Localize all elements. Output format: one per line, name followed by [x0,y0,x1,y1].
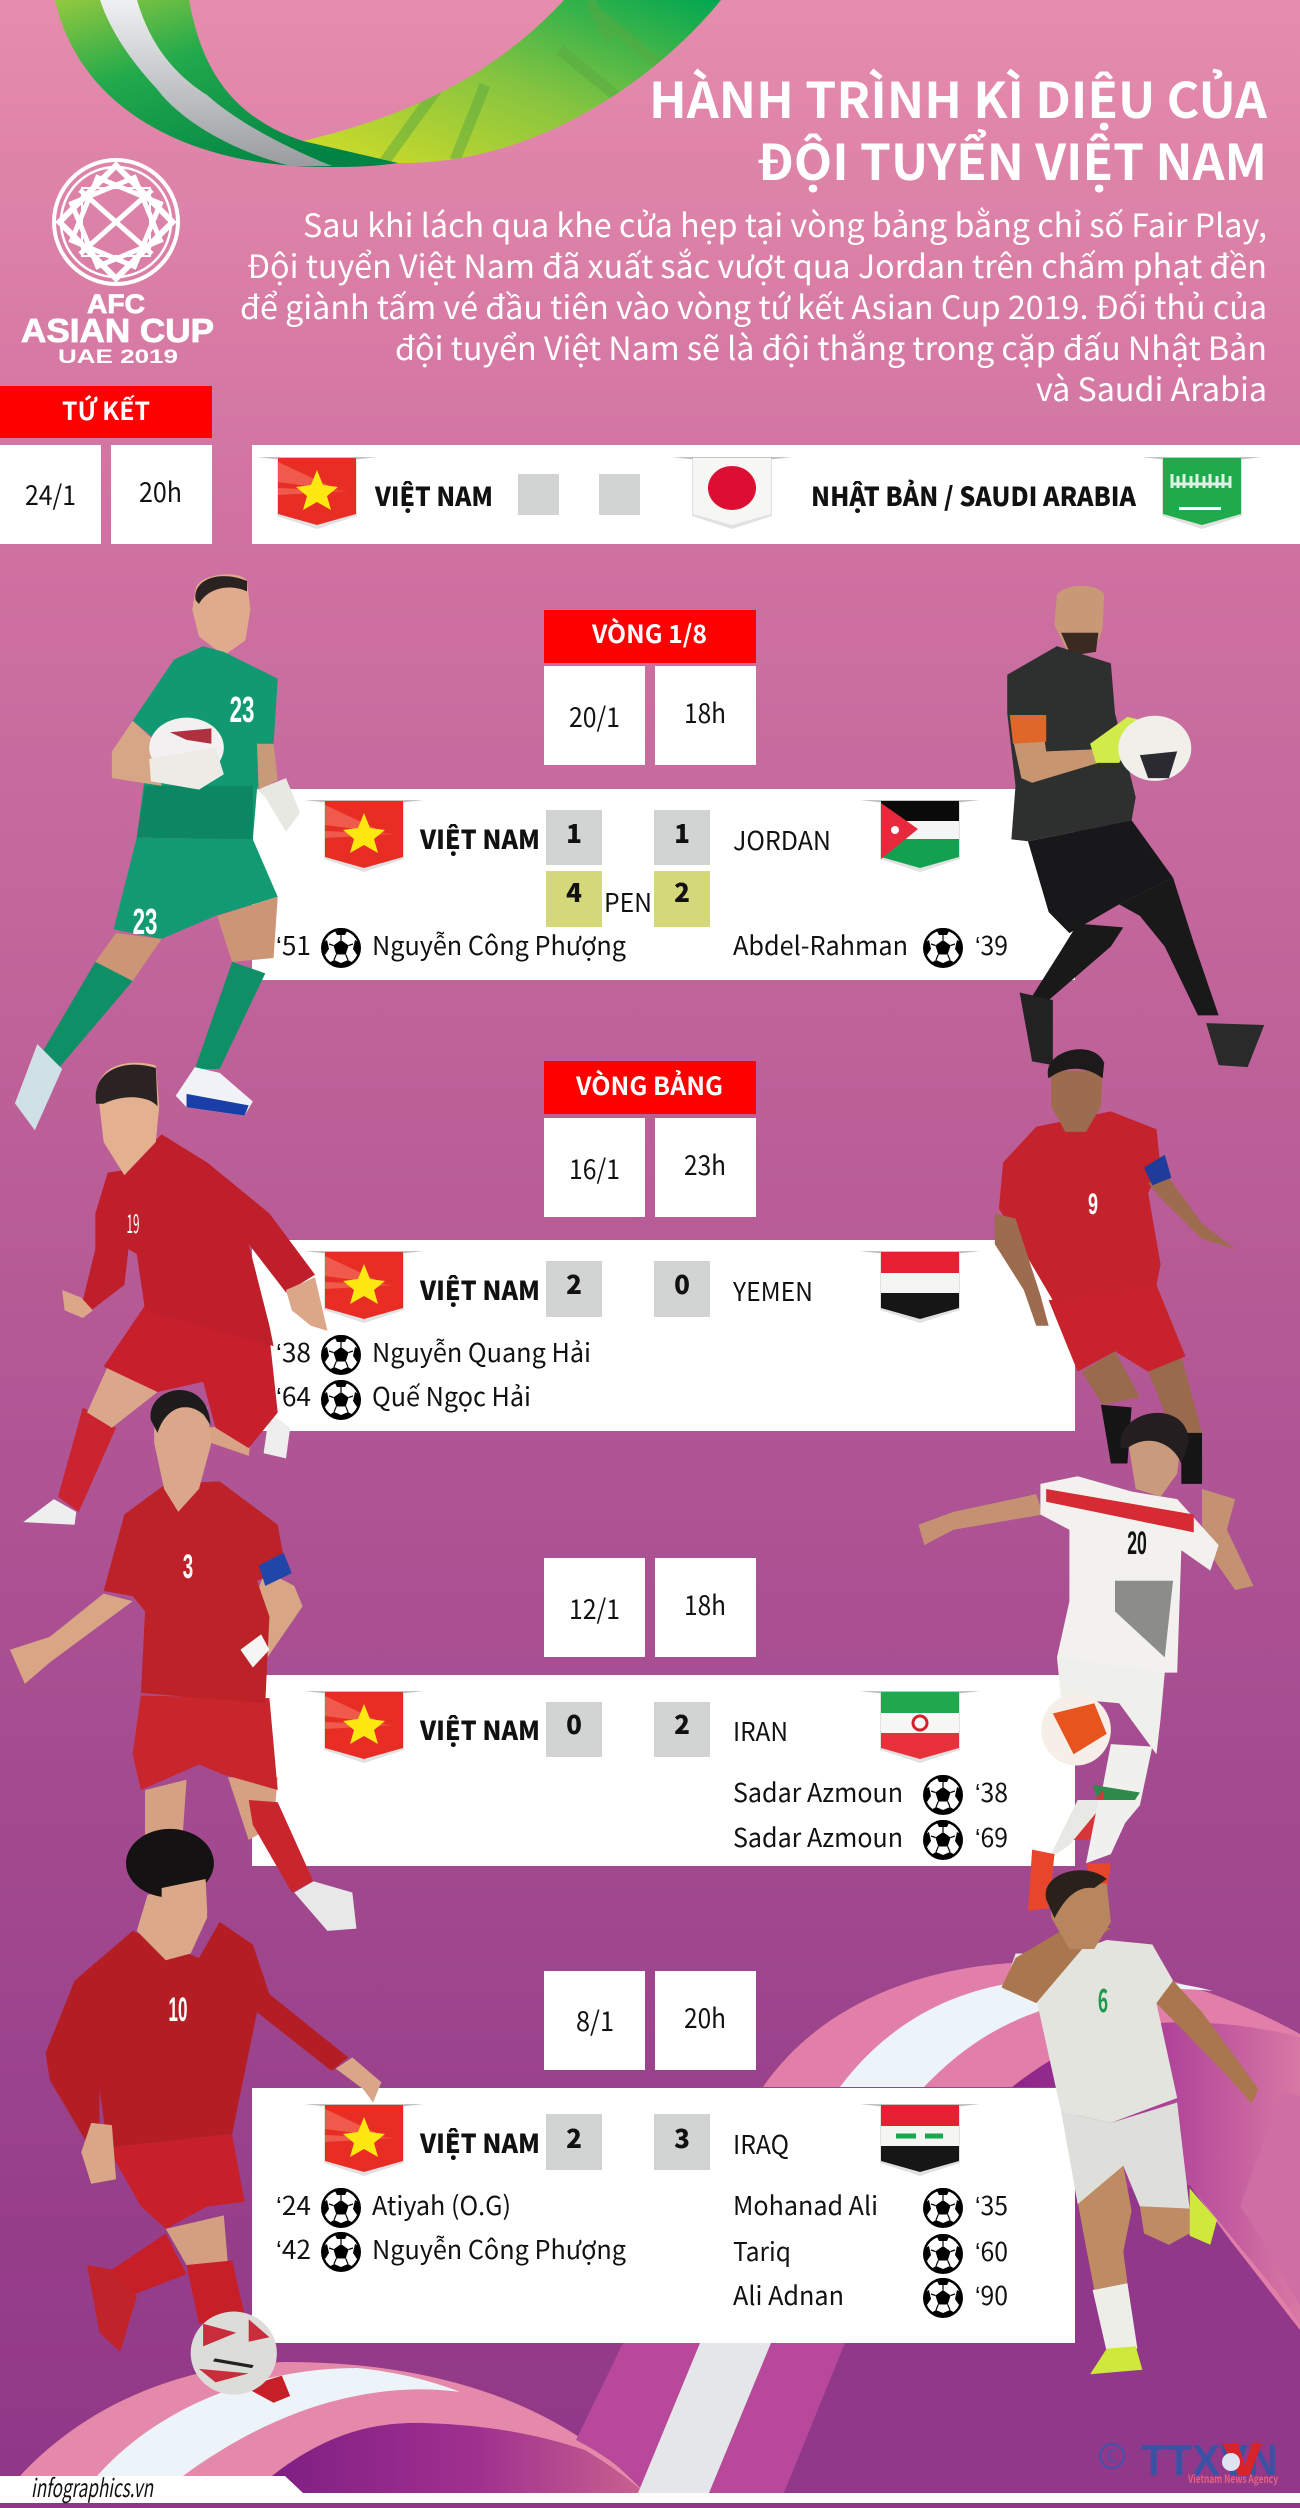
time box: 18h [684,692,726,731]
panel: Vietnam vs Jordan: 1 [674,814,690,851]
panel: quarter-final match [252,445,1300,544]
player: Vietnam goalkeeper in green: 23 [230,691,254,730]
intro text block [240,201,1267,411]
date box: 24/1 [25,474,76,513]
panel: Vietnam vs Iraq: ‘35 [975,2186,1008,2223]
decoration: bottom left arcs [20,2362,645,2493]
panel: Vietnam vs Jordan: VIỆT NAM [419,820,540,857]
panel: Vietnam vs Iran: 2 [674,1705,690,1742]
panel: Vietnam vs Iran: Sadar Azmoun [733,1818,903,1855]
date box [544,1118,645,1217]
player: Jordan goalkeeper in black [1007,586,1264,1067]
panel: Vietnam vs Yemen: 2 [566,1265,582,1302]
panel: Vietnam vs Iran: IRAN [733,1712,788,1749]
panel: Vietnam vs Iraq: IRAQ [733,2125,789,2162]
logo: AFC Asian Cup: UAE 2019 [58,347,178,368]
time box [655,666,756,765]
panel: quarter-final match: VIỆT NAM [374,477,493,514]
panel: Vietnam vs Iran: VIỆT NAM [419,1711,540,1748]
flag: Iraq [860,2104,980,2176]
time box: 20h [139,471,182,510]
player: Vietnam number 3: 3 [183,1547,193,1585]
panel: Vietnam vs Jordan: 4 [566,873,582,910]
date box: 12/1 [569,1588,620,1627]
flag: Saudi Arabia [1142,457,1262,529]
panel: Vietnam vs Jordan: 2 [674,873,690,910]
time box [655,1558,756,1657]
player: Vietnam number 10: 10 [169,1991,187,2029]
intro text block: và Saudi Arabia [1036,365,1267,411]
player: Vietnam number 19 [23,1063,327,1525]
panel: Vietnam vs Jordan: Abdel-Rahman [733,926,908,963]
player: Yemen number 9: 9 [1088,1189,1098,1221]
title: ĐỘI TUYỂN VIỆT NAM [757,124,1267,195]
date box [0,445,101,544]
panel: Vietnam vs Yemen: YEMEN [732,1272,813,1309]
heading: Tứ kết [0,386,212,438]
panel: Vietnam vs Iraq: Nguyễn Công Phượng [372,2230,626,2267]
panel: Vietnam vs Iran: ‘38 [975,1773,1008,1810]
player: Iran number 20 [919,1413,1253,1911]
panel: Vietnam vs Yemen: ‘38 [276,1333,311,1370]
logo: AFC Asian Cup: AFC [87,289,145,319]
date box [544,1558,645,1657]
emblem [54,160,178,284]
date box: 20/1 [569,696,620,735]
heading: Vòng bảng [544,1061,756,1114]
time box: 20h [684,1997,726,2036]
panel: Vietnam vs Jordan: Nguyễn Công Phượng [372,926,626,963]
panel: Vietnam vs Iran: Sadar Azmoun [733,1773,903,1810]
player: Vietnam number 19: 19 [127,1203,139,1241]
panel: Vietnam vs Iraq: 2 [566,2119,582,2156]
intro text block: Sau khi lách qua khe cửa hẹp tại vòng bảng bằng chỉ số Fair Play, [303,201,1267,247]
group stage: Vietnam vs Yemen [252,1061,1075,1431]
source text: infographics.vn [31,2469,154,2505]
logo: AFC Asian Cup: ASIAN CUP [21,312,214,349]
panel: Vietnam vs Iraq: Mohanad Ali [733,2186,878,2223]
date box [544,1971,645,2070]
panel: Vietnam vs Iran [252,1675,1075,1866]
heading: Tứ kết: TỨ KẾT [62,392,150,428]
round of 16 match [252,610,1075,980]
intro text block: đội tuyển Việt Nam sẽ là đội thắng trong cặp đấu Nhật Bản [395,324,1267,370]
panel: Vietnam vs Iraq: VIỆT NAM [419,2124,540,2161]
panel: Vietnam vs Iran: ‘69 [975,1818,1008,1855]
panel: Vietnam vs Jordan: ‘39 [975,926,1008,963]
player: Vietnam number 10 [46,1829,381,2403]
quarter-final round [0,386,1300,544]
time box [655,1118,756,1217]
heading: Vòng 1/8: VÒNG 1/8 [591,615,707,651]
player: Iran number 20: 20 [1127,1527,1147,1561]
panel: Vietnam vs Iraq: ‘24 [276,2186,311,2223]
logo: TTXVN: TTXVN [1141,2436,1278,2485]
player: Iraq number 6 [1001,1870,1258,2374]
panel: Vietnam vs Yemen: Nguyễn Quang Hải [372,1333,591,1370]
flag: Iran [860,1691,980,1763]
date box: 8/1 [576,2000,614,2039]
time box: 18h [684,1584,726,1623]
panel: quarter-final match: NHẬT BẢN / SAUDI ARABIA [811,477,1137,514]
flag: Yemen [860,1251,980,1323]
panel: Vietnam vs Yemen: ‘64 [276,1377,311,1414]
panel: Vietnam vs Iran: 0 [566,1705,582,1742]
panel: Vietnam vs Iraq: Ali Adnan [733,2276,844,2313]
panel: Vietnam vs Jordan: PEN [604,883,652,920]
logo: TTXVN: C [1107,2442,1118,2467]
panel: Vietnam vs Iraq: ‘90 [975,2276,1008,2313]
panel: Vietnam vs Yemen: VIỆT NAM [419,1271,540,1308]
decoration: right arcs [763,1962,1300,2493]
player: Vietnam goalkeeper in green: 23 [133,903,157,942]
player: Vietnam goalkeeper in green [15,574,300,1130]
panel: Vietnam vs Iraq: ‘42 [276,2230,311,2267]
panel: Vietnam vs Iraq: 3 [674,2119,690,2156]
title [649,62,1268,195]
decoration: centre ribbon [576,2343,845,2493]
player: Yemen number 9 [995,1049,1235,1484]
panel: Vietnam vs Iraq [252,2088,1075,2343]
panel: Vietnam vs Yemen: Quế Ngọc Hải [372,1377,531,1414]
panel: Vietnam vs Jordan: 1 [566,814,582,851]
time box [655,1971,756,2070]
decoration: green ribbon top [55,0,721,167]
panel: Vietnam vs Jordan: JORDAN [733,821,831,858]
footer: white bar [0,2469,1300,2505]
title: HÀNH TRÌNH KÌ DIỆU CỦA [649,62,1268,133]
intro text block: Đội tuyển Việt Nam đã xuất sắc vượt qua Jordan trên chấm phạt đền [247,242,1267,288]
intro text block: để giành tấm vé đầu tiên vào vòng tứ kết Asian Cup 2019. Đối thủ của [240,283,1267,329]
panel: Vietnam vs Iraq: ‘60 [975,2232,1008,2269]
group stage: Vietnam vs Iran [252,1558,1075,1866]
panel: Vietnam vs Iraq: Tariq [733,2232,791,2269]
flag: Jordan [860,800,980,872]
flag: Japan [672,457,792,529]
date box [544,666,645,765]
panel: Vietnam vs Iraq: Atiyah (O.G) [372,2186,511,2223]
heading: Vòng 1/8 [544,610,756,663]
time box: 23h [684,1144,726,1183]
logo: AFC Asian Cup [21,160,214,368]
heading: Vòng bảng: VÒNG BẢNG [575,1067,723,1103]
panel: Vietnam vs Yemen: 0 [674,1265,690,1302]
panel: Vietnam vs Jordan [252,789,1075,980]
group stage: Vietnam vs Iraq [252,1971,1075,2343]
panel: Vietnam vs Yemen [252,1240,1075,1431]
flag: Vietnam [257,457,377,529]
panel: Vietnam vs Jordan: ‘51 [276,926,311,963]
time box [111,445,212,544]
player: Vietnam number 3 [10,1390,356,1931]
player: Iraq number 6: 6 [1098,1976,1108,2022]
date box: 16/1 [569,1148,620,1187]
